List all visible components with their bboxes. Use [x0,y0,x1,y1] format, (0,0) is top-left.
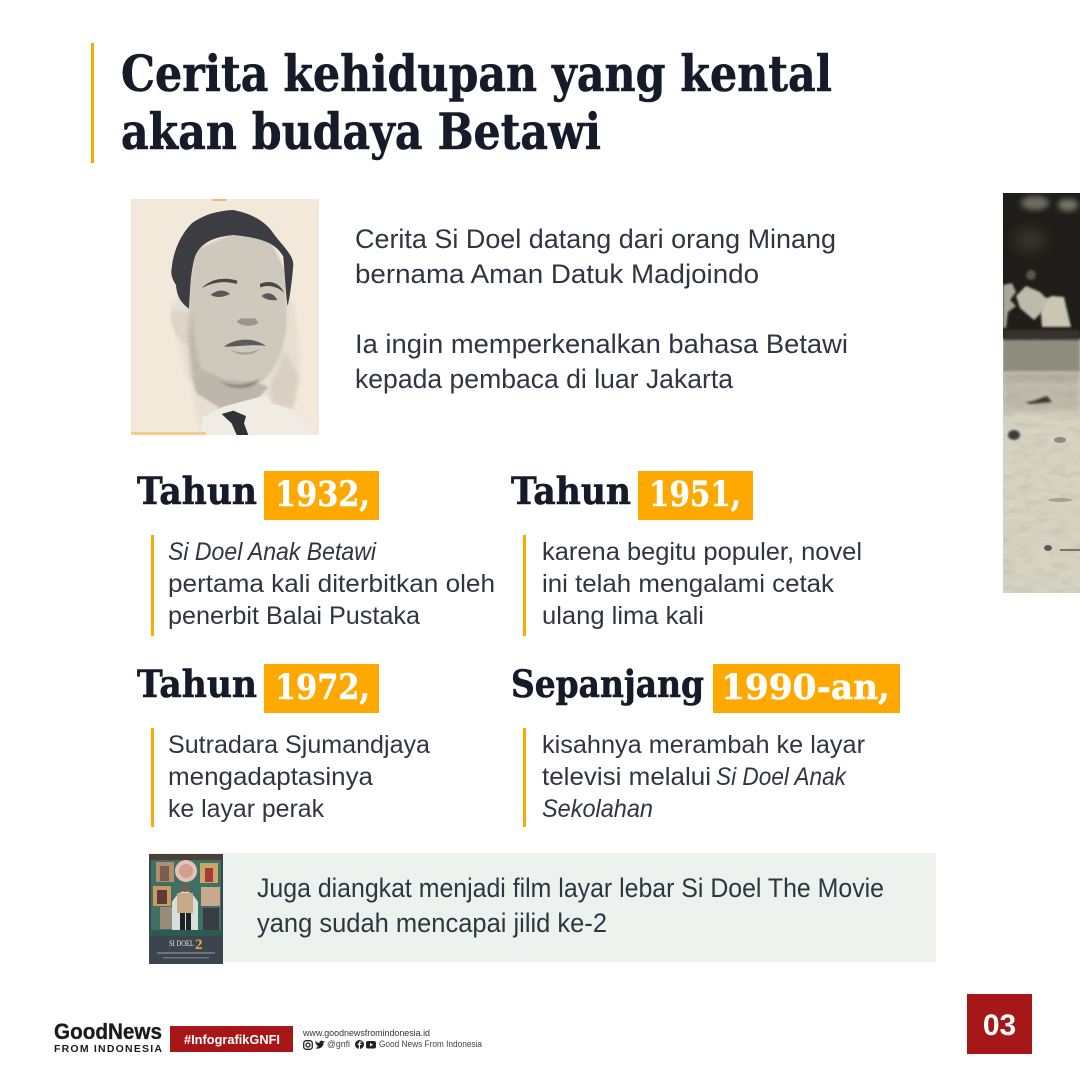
heading: Sepanjang 1990-an [511,662,900,713]
social links: Good News From Indonesia [379,1039,482,1049]
text: 1972 [151,728,430,827]
page number: 03 [983,1009,1016,1042]
icon: youtube [366,1041,376,1048]
heading: Tahun 1972: 1972, [275,667,370,708]
heading: Tahun 1951: Tahun [511,469,631,513]
film poster: 2 [195,937,202,953]
panel: film callout [149,853,936,964]
icon: instagram [304,1041,312,1049]
title [121,44,832,161]
icon: facebook [355,1040,364,1049]
heading: Tahun 1932: Tahun [137,469,257,513]
logo: GoodNews From Indonesia: FROM INDONESIA [54,1043,162,1055]
logo: GoodNews From Indonesia [54,1019,162,1055]
heading: Sepanjang 1990-an: 1990-an, [721,667,890,708]
heading: Tahun 1972 [137,662,379,713]
block: 1972 [137,662,430,827]
callout text [257,873,884,938]
film poster: SI DOEL [169,939,194,948]
title accent bar [91,43,94,163]
text: 1932: pertama kali diterbitkan oleh [168,570,495,598]
block: 1951 [511,469,862,636]
text: 1951 [523,535,862,636]
callout text: yang sudah mencapai jilid ke-2 [257,908,607,938]
callout text: Juga diangkat menjadi film layar lebar Si Doel The Movie [257,873,884,903]
portrait photo of Aman Datuk Madjoindo [131,199,319,435]
heading: Tahun 1932: 1932, [275,474,370,515]
social links: www.goodnewsfromindonesia.id [302,1028,430,1038]
block: 1932 [137,469,495,636]
text: 1990-an [523,728,865,827]
text: 1951: ulang lima kali [542,602,704,630]
heading: Tahun 1951 [511,469,753,520]
text: 1990-an: Sekolahan [542,795,653,823]
social links [302,1028,482,1049]
text: 1951: karena begitu populer, novel [542,538,862,566]
intro text [355,224,848,394]
text: 1972: ke layar perak [168,795,324,823]
hashtag badge [170,1026,293,1052]
title: akan budaya Betawi [121,102,601,161]
block: 1990-an [511,662,900,827]
intro text: bernama Aman Datuk Madjoindo [355,259,759,289]
hashtag badge: #InfografikGNFI [184,1032,280,1047]
text: 1990-an: kisahnya merambah ke layar [542,731,865,759]
film poster [149,854,223,964]
text: 1972: mengadaptasinya [168,763,373,791]
side photo strip [1003,193,1080,593]
social links: @gnfi [327,1039,350,1049]
intro text: Ia ingin memperkenalkan bahasa Betawi [355,329,848,359]
heading: Tahun 1951: 1951, [649,474,741,515]
intro text: kepada pembaca di luar Jakarta [355,364,734,394]
page number [967,994,1032,1054]
text: 1990-an: televisi melalui [542,763,711,791]
heading: Tahun 1932 [137,469,379,520]
heading: Tahun 1972: Tahun [137,662,257,706]
text: 1932: Si Doel Anak Betawi [168,538,377,566]
text: 1990-an: Si Doel Anak [716,763,847,791]
text: 1972: Sutradara Sjumandjaya [168,731,430,759]
text: 1951: ini telah mengalami cetak [542,570,835,598]
intro text: Cerita Si Doel datang dari orang Minang [355,224,836,254]
heading: Sepanjang 1990-an: Sepanjang [511,662,704,706]
title: Cerita kehidupan yang kental [121,44,832,103]
logo: GoodNews From Indonesia: GoodNews [54,1019,162,1044]
icon: twitter [315,1041,325,1049]
text: 1932 [151,535,495,636]
text: 1932: penerbit Balai Pustaka [168,602,420,630]
